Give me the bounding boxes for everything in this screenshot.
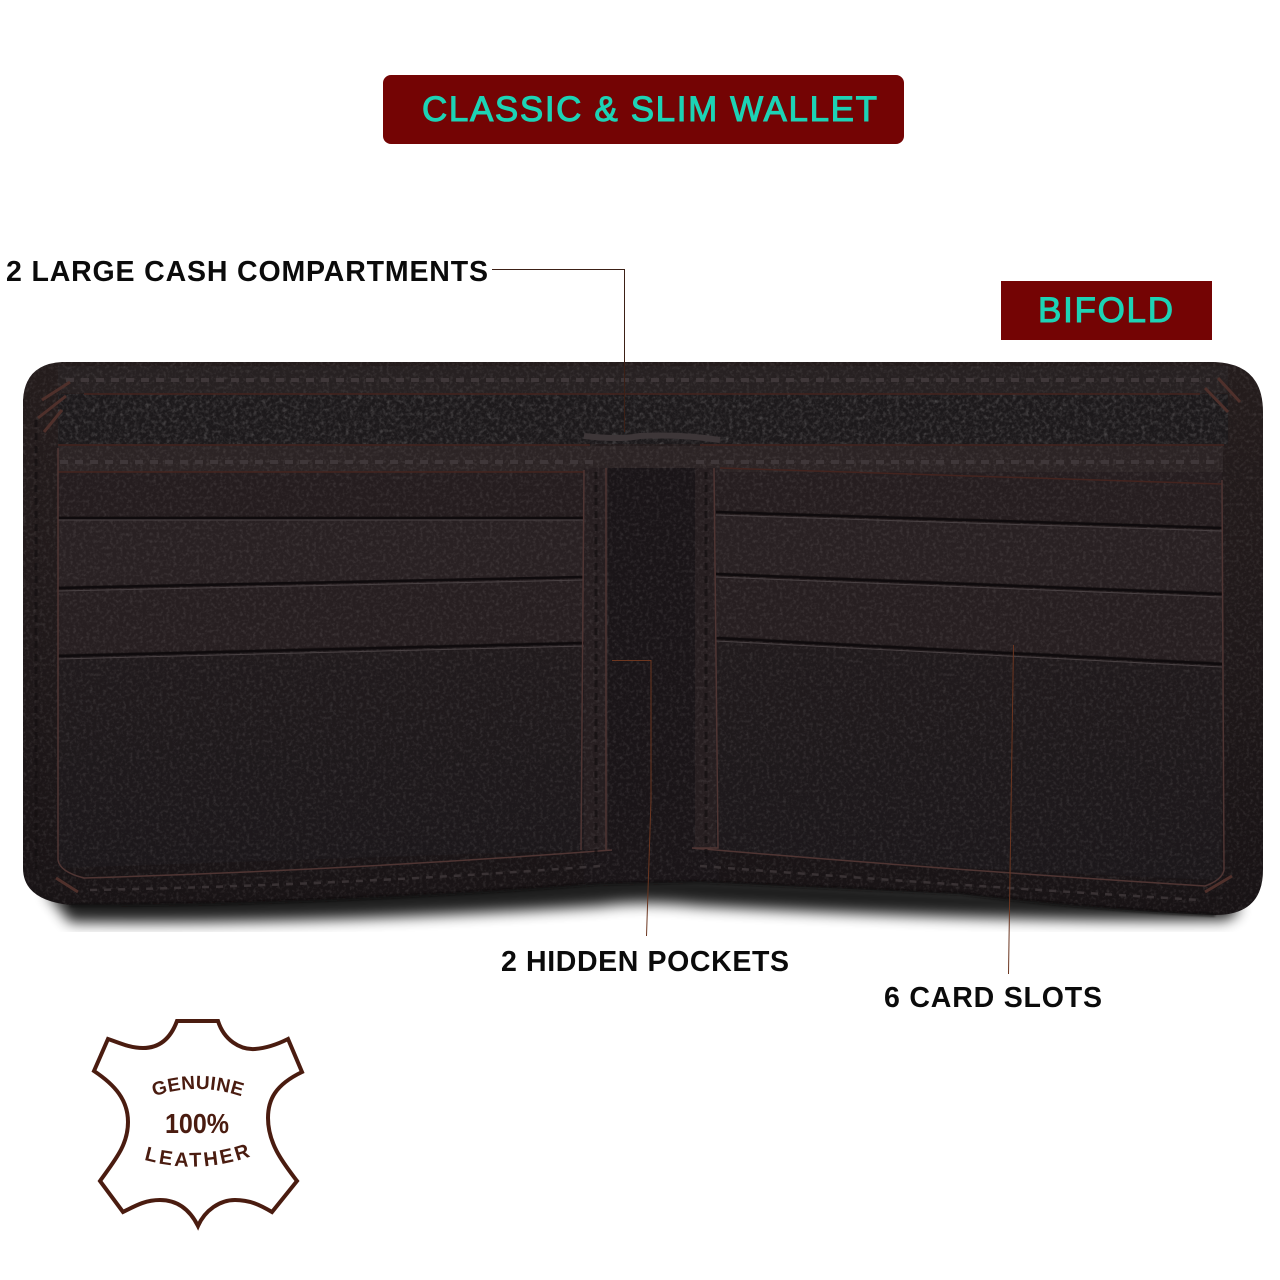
leader lines — [492, 270, 1014, 974]
left lower pocket — [58, 644, 584, 868]
icon: genuine leather badge — [92, 1019, 304, 1231]
coarse grain on cash band — [58, 394, 1228, 444]
badge text: genuine: GENUINE — [152, 1076, 244, 1096]
wallet body — [23, 362, 1263, 915]
leather grain — [23, 362, 1263, 915]
badge text: leather: LEATHER — [145, 1144, 250, 1167]
left card slots — [58, 472, 584, 516]
top rim band — [58, 366, 1228, 393]
spine — [608, 468, 695, 508]
slot and seam lines — [36, 378, 1240, 900]
label: cash compartments: 2 LARGE CASH COMPARTMENTS — [6, 256, 488, 288]
label: card slots: 6 CARD SLOTS — [884, 982, 1102, 1014]
leader: card slots — [1008, 645, 1014, 974]
leader: cash compartments — [492, 270, 624, 432]
bottom edge dark blend — [70, 882, 1215, 915]
title banner: CLASSIC & SLIM WALLET — [422, 90, 877, 129]
leader: hidden pockets — [612, 660, 651, 936]
label: hidden pockets: 2 HIDDEN POCKETS — [501, 946, 789, 978]
wallet shadow — [45, 872, 1238, 922]
wallet photo — [23, 362, 1263, 922]
title banner — [383, 75, 904, 144]
cash compartment band — [58, 394, 1228, 444]
right card slots — [716, 472, 1222, 526]
badge: bifold: BIFOLD — [1038, 291, 1173, 330]
right lower pocket — [716, 789, 719, 850]
badge text: 100%: 100% — [165, 1108, 229, 1139]
badge: bifold — [1001, 281, 1212, 340]
